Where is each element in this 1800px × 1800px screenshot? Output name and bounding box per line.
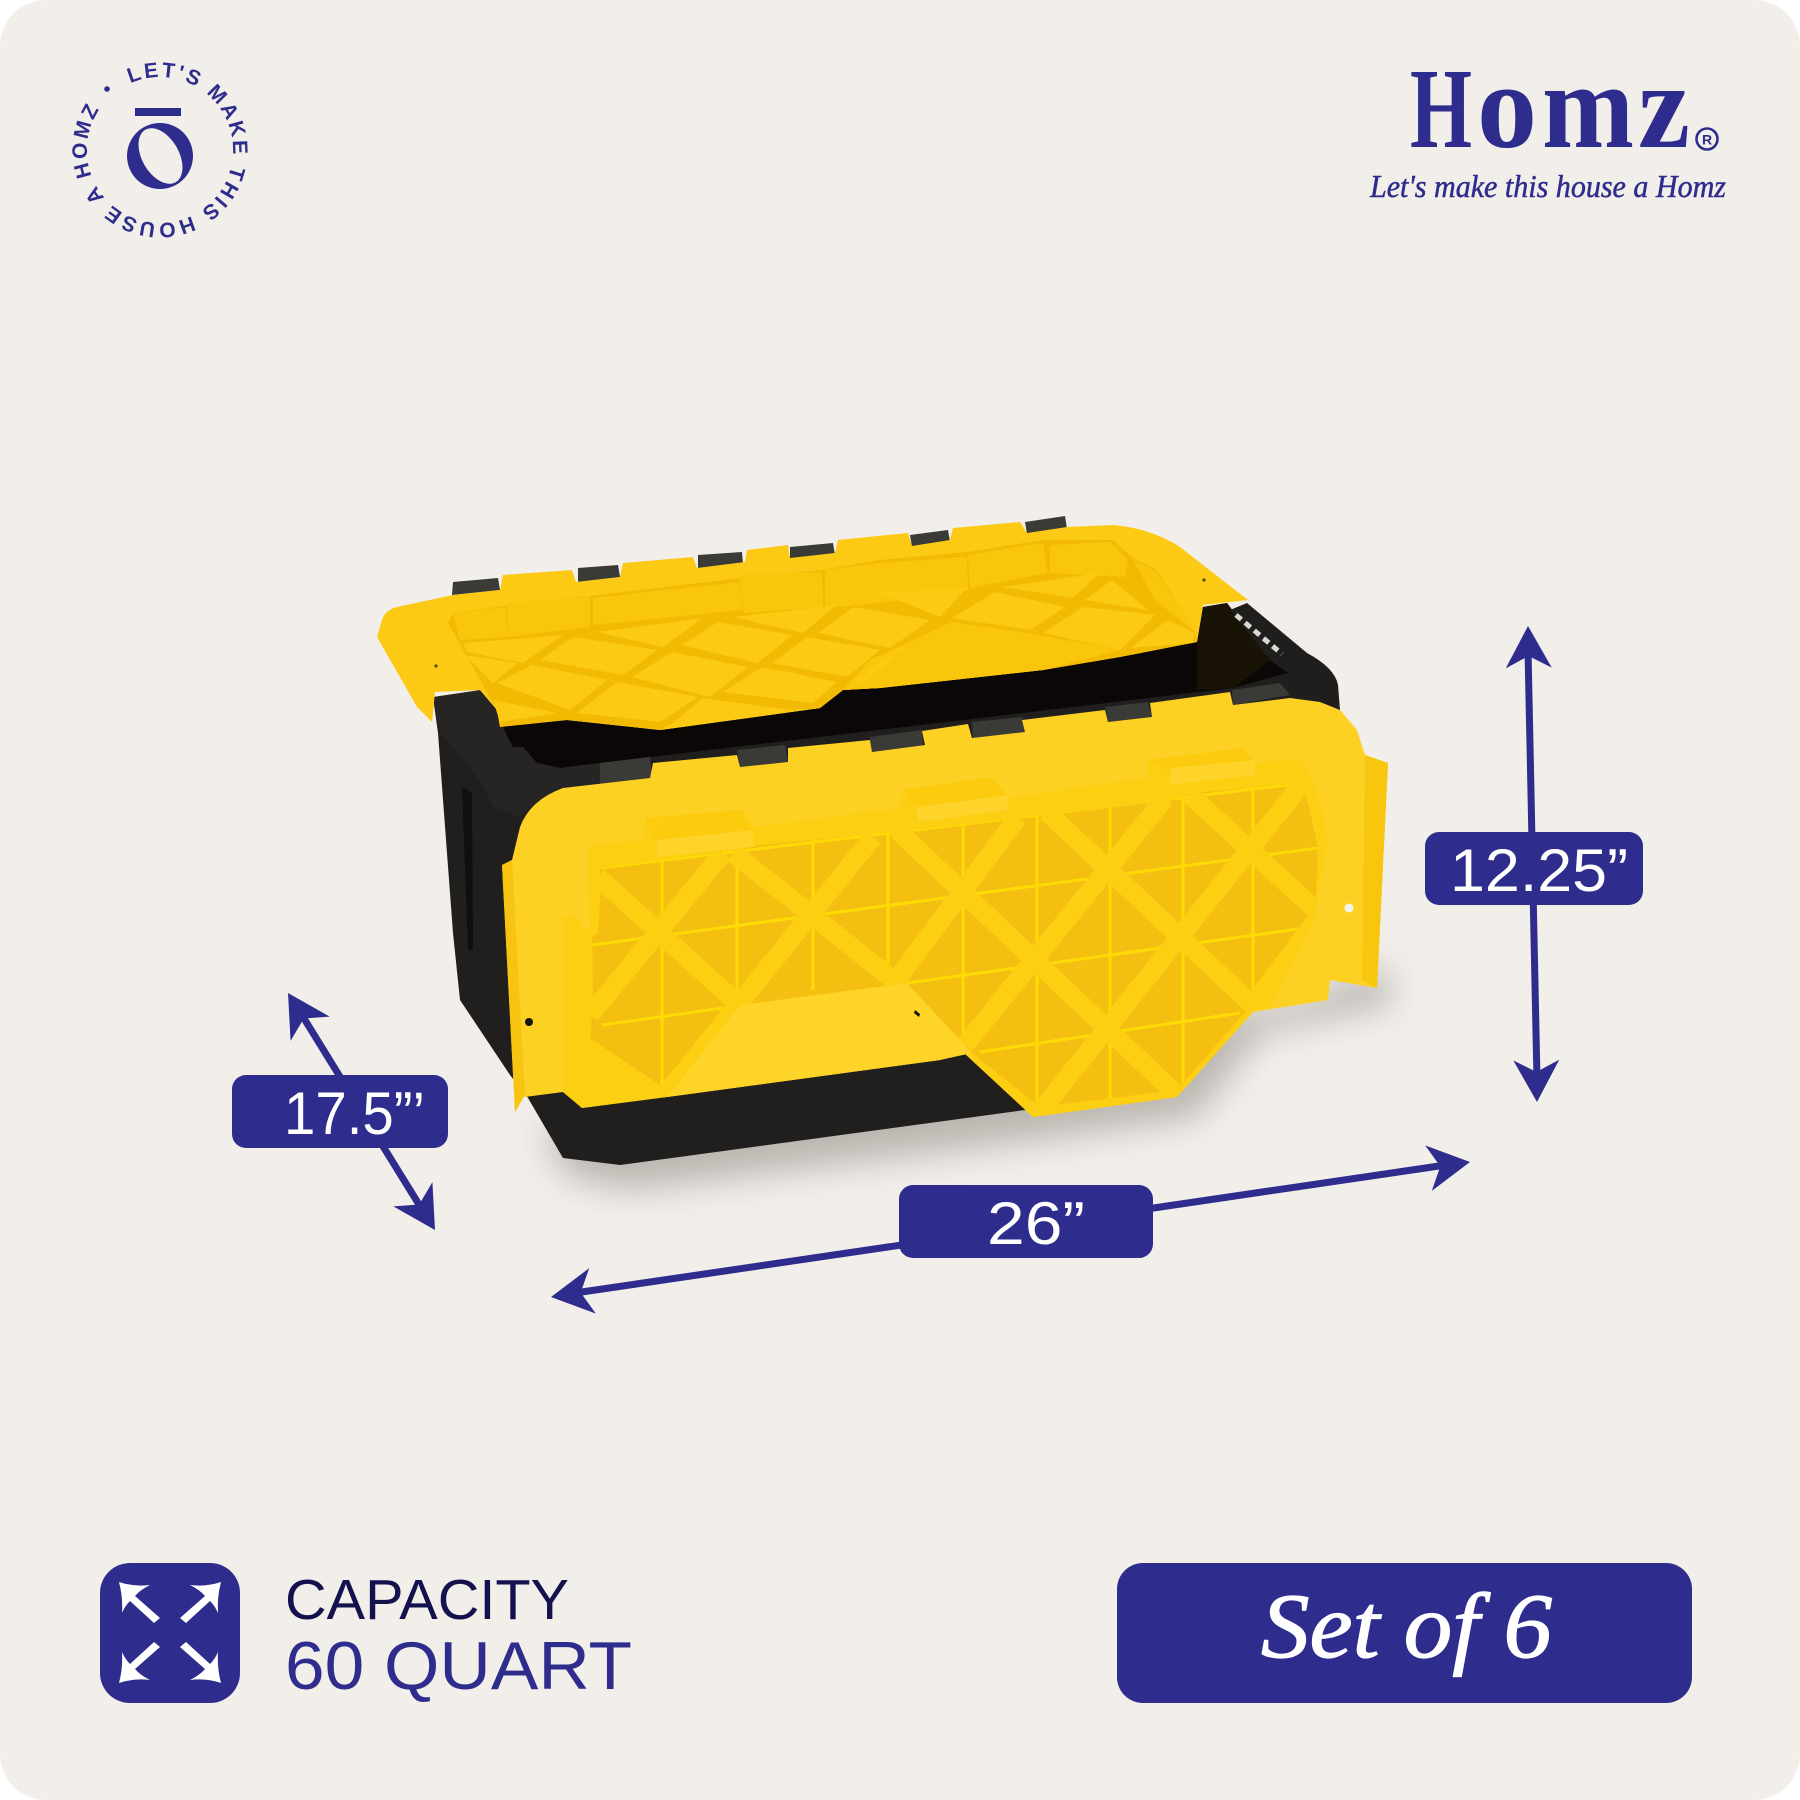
brand wordmark: o — [1477, 39, 1537, 174]
front lid ribbed panel — [563, 748, 1328, 1117]
height dimension arrow — [1425, 626, 1643, 1102]
brand wordmark — [1369, 39, 1727, 204]
lid recessed basin — [448, 540, 1197, 730]
brand wordmark: H — [1410, 45, 1472, 172]
tote rim left — [433, 690, 600, 817]
width dimension arrow — [548, 1139, 1473, 1320]
lid diamond tiles — [463, 573, 1195, 730]
panel tabs — [645, 748, 1255, 845]
circular badge logo: LET'S MAKE THIS HOUSE A HOMZ — [72, 62, 248, 238]
front rim hinges — [600, 683, 1290, 785]
brand wordmark: R — [1702, 132, 1712, 148]
diagonal ribs — [598, 877, 737, 1003]
tote body — [433, 650, 1340, 1165]
lower solid face — [667, 983, 972, 1097]
tote opening — [497, 603, 1288, 768]
front lid — [502, 692, 1388, 1117]
brand wordmark: m — [1542, 39, 1634, 174]
product image: storage tote — [377, 516, 1392, 1190]
lid holes — [525, 1018, 533, 1026]
thin ribs — [662, 780, 1253, 1110]
back lid hinges — [452, 516, 1067, 595]
capacity text — [285, 1568, 632, 1704]
capacity text: CAPACITY — [285, 1568, 569, 1632]
height label: 12.25” — [1450, 837, 1628, 904]
right flange — [1362, 755, 1388, 988]
tote rim right — [1230, 603, 1340, 710]
side groove — [462, 787, 473, 950]
brand wordmark: z — [1638, 39, 1690, 174]
brand wordmark: Let's make this house a Homz — [1369, 168, 1727, 204]
capacity text: 60 QUART — [285, 1628, 632, 1704]
set of 6 badge — [1117, 1563, 1692, 1703]
left flange — [502, 860, 525, 1112]
depth label: 17.5”’ — [284, 1080, 425, 1147]
capacity icon — [100, 1563, 240, 1703]
lattice — [590, 784, 1318, 1104]
lid inner walls — [453, 542, 1195, 690]
width label: 26” — [987, 1190, 1085, 1257]
shadow — [540, 965, 1392, 1190]
set of 6 badge: Set of 6 — [1261, 1575, 1552, 1677]
open back lid — [377, 522, 1248, 730]
depth dimension arrow — [232, 981, 455, 1242]
